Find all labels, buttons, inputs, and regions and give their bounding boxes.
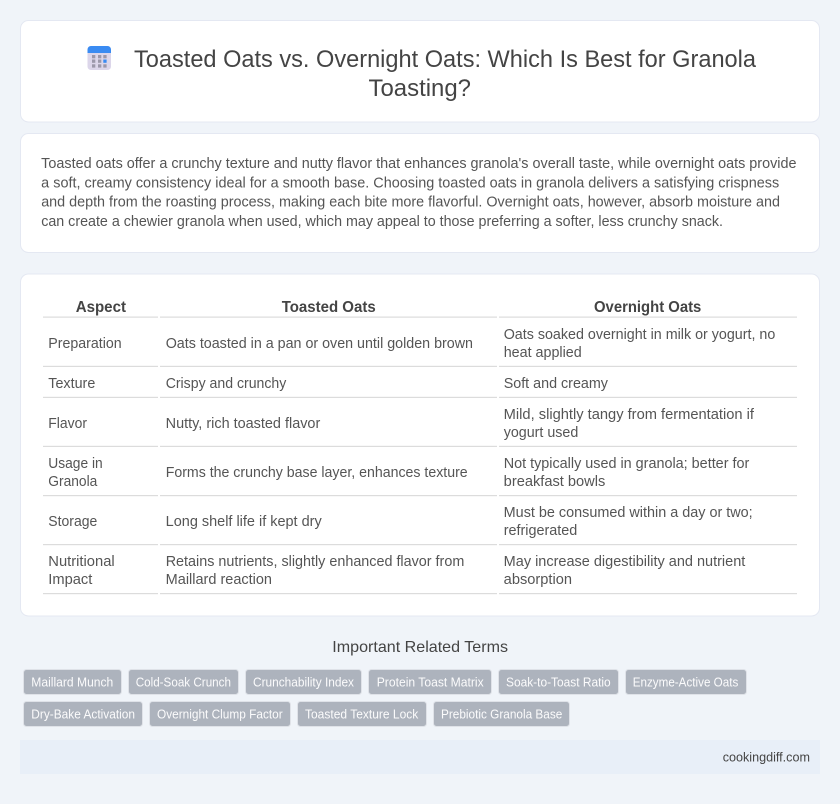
panel: description text: and depth from the roasting process, making each bite more flavorful. Overnight oats, however, absorb moisture and (41, 195, 780, 211)
panel: title card (20, 20, 820, 122)
title: Toasting? (368, 75, 471, 102)
related term chips: Prebiotic Granola Base (441, 708, 562, 722)
row: storage: Must be consumed within a day or two; (504, 505, 753, 521)
row: storage (48, 505, 753, 539)
panel: description text: Toasted oats offer a crunchy texture and nutty flavor that enhances granola's overall taste, while overnight oats provide (41, 156, 796, 172)
panel: description text: a soft, creamy consistency ideal for a smooth base. Choosing toasted oats in granola delivers a satisfying crispness (41, 175, 779, 191)
row: usage in granola: Granola (48, 474, 97, 490)
related term chips: Soak-to-Toast Ratio (506, 676, 611, 690)
row: nutritional impact: May increase digestibility and nutrient (504, 554, 745, 570)
row: preparation: heat applied (504, 345, 582, 361)
row: flavor (48, 407, 755, 441)
row: flavor: Flavor (48, 416, 87, 432)
row: preparation: Oats toasted in a pan or oven until golden brown (166, 336, 473, 352)
row: flavor: yogurt used (504, 425, 578, 441)
row: texture: Texture (48, 376, 95, 392)
row: preparation: Oats soaked overnight in milk or yogurt, no (504, 327, 775, 343)
heading: related terms: Important Related Terms (332, 639, 508, 656)
row: nutritional impact: Nutritional (48, 554, 115, 570)
panel: comparison table (20, 274, 820, 616)
row: nutritional impact: Maillard reaction (166, 572, 272, 588)
row: texture: Soft and creamy (504, 376, 609, 392)
related term chips: Protein Toast Matrix (377, 676, 484, 690)
row: preparation (48, 327, 775, 361)
row: usage in granola: Not typically used in granola; better for (504, 456, 749, 472)
row: nutritional impact: Impact (48, 572, 92, 588)
row: usage in granola: Usage in (48, 456, 103, 472)
related term chips: Cold-Soak Crunch (136, 676, 231, 690)
table header row: Aspect (76, 299, 127, 316)
row: flavor: Nutty, rich toasted flavor (166, 416, 320, 432)
row: usage in granola: Forms the crunchy base layer, enhances texture (166, 465, 468, 481)
panel: description text: can create a chewier granola when used, which may appeal to those preferring a softer, less crunchy snack. (41, 214, 723, 230)
footer bar: cookingdiff.com (723, 749, 810, 764)
panel: description text (20, 134, 820, 252)
title: Toasted Oats vs. Overnight Oats: Which Is Best for Granola (134, 46, 757, 73)
table header row: Toasted Oats (282, 299, 376, 316)
related term chips: Toasted Texture Lock (305, 708, 419, 722)
table header row (76, 299, 701, 316)
row: flavor: Mild, slightly tangy from fermentation if (504, 407, 755, 423)
related term chips: Dry-Bake Activation (31, 708, 135, 722)
title (134, 46, 757, 102)
row: nutritional impact (48, 554, 745, 588)
row: usage in granola (48, 456, 749, 490)
related term chips: Overnight Clump Factor (157, 708, 283, 722)
related term chips: Maillard Munch (31, 676, 113, 690)
row: texture: Crispy and crunchy (166, 376, 287, 392)
related term chips: Crunchability Index (253, 676, 355, 690)
row: storage: Storage (48, 514, 97, 530)
row: preparation: Preparation (48, 336, 122, 352)
related term chips (24, 670, 746, 726)
row: storage: Long shelf life if kept dry (166, 514, 323, 530)
row: texture (48, 376, 609, 392)
row: nutritional impact: Retains nutrients, slightly enhanced flavor from (166, 554, 464, 570)
table header row: Overnight Oats (594, 299, 701, 316)
footer bar (20, 740, 820, 774)
icon: calendar (88, 46, 111, 70)
related term chips: Enzyme-Active Oats (633, 676, 738, 690)
row: nutritional impact: absorption (504, 572, 572, 588)
row: storage: refrigerated (504, 523, 577, 539)
row: usage in granola: breakfast bowls (504, 474, 605, 490)
